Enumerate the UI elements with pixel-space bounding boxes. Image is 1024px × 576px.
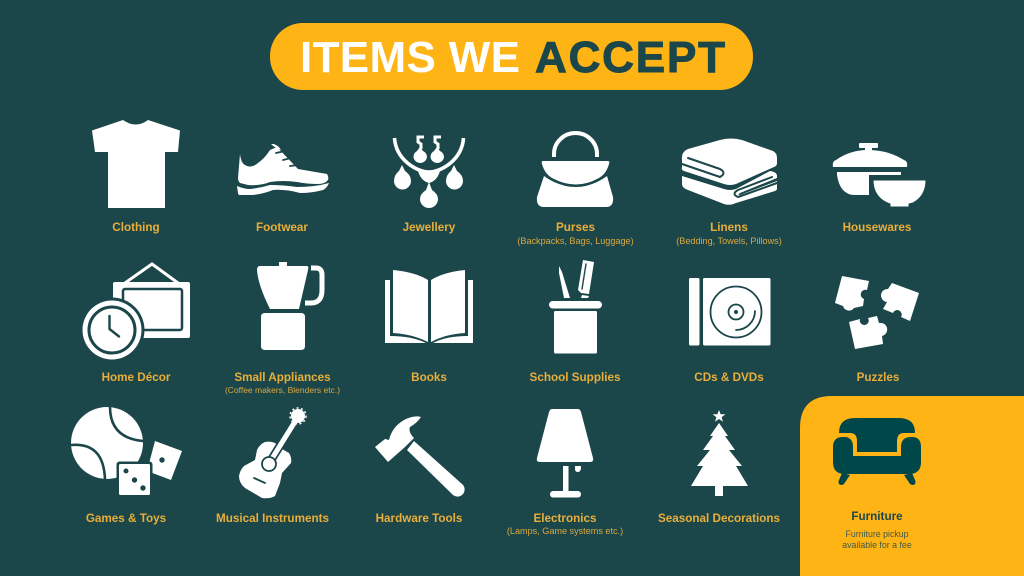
label: books: Books <box>411 371 447 384</box>
label: linens: Linens <box>710 221 748 234</box>
label: games and toys: Games & Toys <box>86 512 167 525</box>
icon: hammer <box>375 416 465 497</box>
label: school supplies: School Supplies <box>530 371 621 384</box>
label: linens <box>676 221 782 246</box>
icon: cd case <box>689 278 770 346</box>
label: footwear: Footwear <box>256 221 308 234</box>
icon: t-shirt <box>92 120 180 208</box>
label: purses: Purses <box>556 221 595 234</box>
icon: sofa <box>833 418 921 485</box>
icon: lamp <box>537 409 593 498</box>
label: purses <box>517 221 634 246</box>
icon: open book <box>385 270 473 343</box>
icon: picture frame and clock <box>80 264 190 362</box>
text: furniture note: Furniture pickup <box>845 529 909 539</box>
label: jewellery: Jewellery <box>403 221 456 234</box>
title: ITEMS WE <box>300 33 520 82</box>
title <box>270 23 753 90</box>
label: home decor: Home Décor <box>102 371 171 384</box>
label: small appliances: Small Appliances <box>234 371 331 384</box>
label: clothing: Clothing <box>112 221 160 234</box>
label: housewares: Housewares <box>843 221 912 234</box>
icon: puzzle pieces <box>835 276 919 349</box>
icon: pencil cup <box>549 260 602 354</box>
label: cds and dvds: CDs & DVDs <box>694 371 764 384</box>
label: seasonal decorations: Seasonal Decorations <box>658 512 781 525</box>
label: hardware tools: Hardware Tools <box>376 512 463 525</box>
icon: ball and dice <box>71 407 182 498</box>
label: small appliances: (Coffee makers, Blenders etc.) <box>225 385 340 395</box>
text: furniture note: available for a fee <box>842 540 912 550</box>
icon: guitar <box>239 408 306 498</box>
icon: christmas tree <box>691 410 748 496</box>
label: electronics <box>507 512 623 536</box>
title: ACCEPT <box>535 33 725 82</box>
label: linens: (Bedding, Towels, Pillows) <box>676 236 782 246</box>
icon: jewellery <box>394 137 464 208</box>
icon: blender <box>257 262 322 350</box>
icon: folded towels <box>682 138 777 205</box>
icon: shoe <box>237 144 329 195</box>
label: electronics: Electronics <box>533 512 597 525</box>
label: electronics: (Lamps, Game systems etc.) <box>507 526 623 536</box>
label: musical instruments: Musical Instruments <box>216 512 329 525</box>
label: small appliances <box>225 371 340 395</box>
label: puzzles: Puzzles <box>857 371 900 384</box>
panel: furniture <box>800 396 1024 576</box>
label: purses: (Backpacks, Bags, Luggage) <box>517 236 634 246</box>
icon: pot and bowl <box>833 143 926 207</box>
icon: purse <box>537 133 613 207</box>
label: furniture: Furniture <box>851 510 903 523</box>
